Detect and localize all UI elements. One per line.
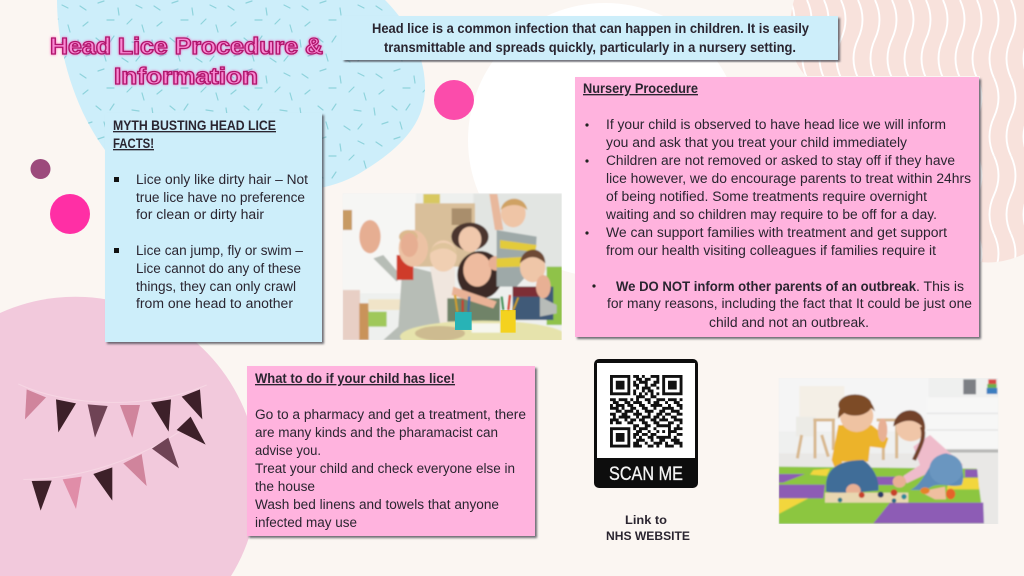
panel: myth busting facts: FACTS! xyxy=(113,136,154,151)
decorative wavy blob top right xyxy=(790,0,1024,263)
panel: myth busting facts: from one head to another xyxy=(136,296,294,311)
panel: what to do: the house xyxy=(255,479,315,494)
panel: nursery procedure: lice however, we do encourage parents to treat within 24hrs xyxy=(606,171,971,186)
panel: what to do: infected may use xyxy=(255,515,357,530)
link caption xyxy=(606,513,690,543)
panel: myth busting facts: Lice only like dirty hair – Not xyxy=(136,172,308,187)
panel: what to do: What to do if your child has lice! xyxy=(255,371,455,386)
panel: nursery procedure: for many reasons, including the fact that It could be just one xyxy=(607,296,972,311)
panel: myth busting facts: true lice have no preference xyxy=(136,190,305,205)
panel: what to do: Go to a pharmacy and get a treatment, there xyxy=(255,407,526,422)
panel: nursery procedure: If your child is observed to have head lice we will inform xyxy=(606,117,946,132)
panel: nursery procedure: We DO NOT inform other parents of an outbreak xyxy=(616,279,917,294)
panel: what to do: advise you. xyxy=(255,443,321,458)
panel: what to do: are many kinds and the pharamacist can xyxy=(255,425,498,440)
intro callout xyxy=(342,16,838,60)
decorative dot: plum xyxy=(30,159,50,179)
QR code: SCAN ME xyxy=(609,464,683,485)
panel: myth busting facts: Lice can jump, fly or swim – xyxy=(136,243,304,258)
panel: nursery procedure xyxy=(575,77,979,337)
panel: nursery procedure: Nursery Procedure xyxy=(583,81,698,96)
intro callout: Head lice is a common infection that can happen in children. It is easily xyxy=(372,21,810,36)
decorative blue sprinkle blob xyxy=(57,0,425,199)
decorative dot: hot pink left xyxy=(50,194,90,234)
decorative dot: pink top xyxy=(434,80,474,120)
panel: nursery procedure: . This is xyxy=(916,279,964,294)
panel: nursery procedure: We can support families with treatment and get support xyxy=(606,225,947,240)
link caption: Link to xyxy=(625,513,667,527)
panel: nursery procedure: you and ask that you treat your child immediately xyxy=(606,135,907,150)
panel: myth busting facts: things, they can only crawl xyxy=(136,279,296,294)
panel: nursery procedure: child and not an outbreak. xyxy=(709,315,869,330)
panel: what to do: Treat your child and check everyone else in xyxy=(255,461,515,476)
title xyxy=(50,33,323,89)
panel: nursery procedure: from our health visiting colleagues if families require it xyxy=(606,243,936,258)
panel: myth busting facts xyxy=(105,113,322,342)
panel: myth busting facts: for clean or dirty hair xyxy=(136,207,265,222)
title: Head Lice Procedure & xyxy=(50,33,323,59)
photo: teacher with children xyxy=(342,194,562,340)
link caption: NHS WEBSITE xyxy=(606,529,690,543)
panel: myth busting facts: MYTH BUSTING HEAD LICE xyxy=(113,118,276,133)
photo: two children playing on mat xyxy=(777,377,1000,525)
panel: myth busting facts: Lice cannot do any of these xyxy=(136,261,301,276)
title: Information xyxy=(114,63,258,89)
panel: what to do: Wash bed linens and towels that anyone xyxy=(255,497,499,512)
panel: nursery procedure: of being notified. Some treatments require overnight xyxy=(606,189,927,204)
panel: what to do xyxy=(247,366,535,536)
QR code xyxy=(594,359,698,488)
decorative pink circle bottom left xyxy=(0,297,258,576)
intro callout: transmittable and spreads quickly, particularly in a nursery setting. xyxy=(384,40,796,55)
panel: nursery procedure: Children are not removed or asked to stay off if they have xyxy=(606,153,955,168)
bunting flags xyxy=(18,384,207,511)
panel: nursery procedure: waiting and so children may require to be off for a day. xyxy=(605,207,937,222)
decorative white circle xyxy=(468,3,742,277)
